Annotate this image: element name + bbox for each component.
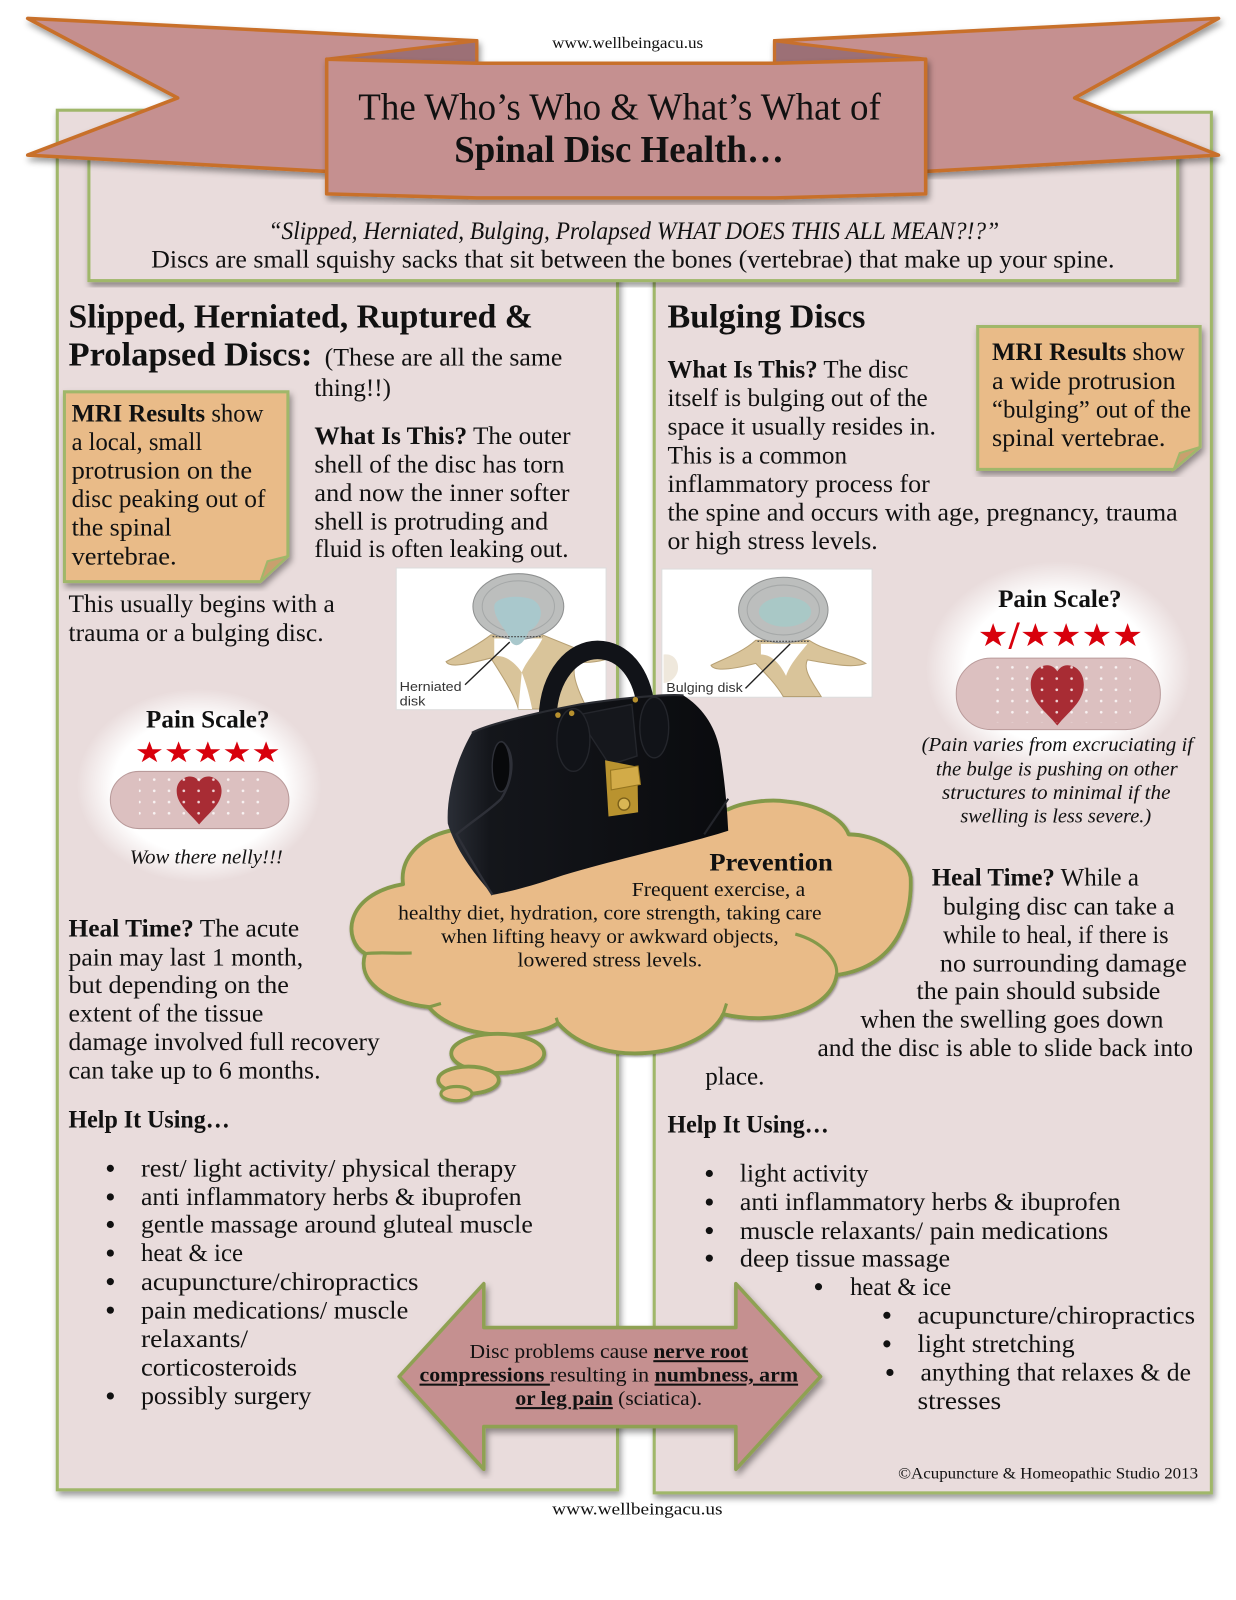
arrow: nerve root callout [399,1284,821,1469]
text: what is this right [667,357,1178,555]
list: left remedies: relaxants/ [141,1326,248,1353]
icon: bandage with heart [110,771,289,829]
text: heal time left: Heal Time? The acute [69,916,299,943]
text: prevention: healthy diet, hydration, core strength, taking care [398,902,822,924]
text: prevention: when lifting heavy or awkward objects, [441,926,779,948]
list: right remedies: light stretching [917,1331,1075,1358]
note: MRI results left: the spinal [72,515,172,542]
list: left remedies: possibly surgery [141,1383,312,1410]
text: heal time left: extent of the tissue [69,1000,263,1027]
pain scale left: Pain Scale? [146,707,270,734]
icon: doctor's bag [448,650,728,895]
website top: www.wellbeingacu.us [552,35,703,52]
text: what is this right: itself is bulging out of the [667,385,928,412]
text: what is this left: What Is This? The outer [314,423,571,450]
arrow: nerve root callout: compressions resulting in numbness, arm [420,1365,798,1387]
note: MRI results left: protrusion on the [72,458,252,485]
text: heal time left: pain may last 1 month, [69,944,303,971]
text: what is this left [314,423,571,563]
text: heal time right: when the swelling goes down [860,1007,1164,1034]
label: bulging disk: Bulging disk [666,681,743,695]
stars: one of five: ★/★★★★ [978,618,1143,654]
text: what is this left: shell is protruding and [314,509,549,536]
text: heal time left [69,916,380,1085]
text: prevention [398,849,833,971]
text: what is this right: the spine and occurs with age, pregnancy, trauma [667,499,1178,526]
list: left remedies [107,1156,533,1410]
note: MRI results left: MRI Results show [72,400,263,427]
pain scale left [77,689,322,883]
copyright: ©Acupuncture & Homeopathic Studio 2013 [898,1466,1198,1483]
text: pain note right: (Pain varies from excruciating if [922,734,1196,756]
note: MRI results left: disc peaking out of [72,486,266,513]
website bottom: www.wellbeingacu.us [552,1499,723,1518]
note: MRI results right: spinal vertebrae. [992,425,1165,452]
text: intro definition: Discs are small squishy sacks that sit between the bones (vertebrae) that make up your spine. [151,246,1114,273]
banner ribbon [28,18,1219,198]
ribbon right tail [775,18,1219,171]
text: heal time left: but depending on the [69,972,289,999]
note: MRI results right: a wide protrusion [992,368,1176,395]
cloud shape [352,801,911,1101]
ribbon right fold [775,41,926,63]
list: left remedies: gentle massage around gluteal muscle [141,1212,533,1239]
label: herniated disk: disk [400,694,426,708]
note: MRI results right: MRI Results show [992,339,1185,366]
list: right remedies: heat & ice [850,1274,951,1301]
panel: left column [57,110,617,1490]
list: left remedies: anti inflammatory herbs & ibuprofen [141,1184,522,1211]
heading: slipped discs: (These are all the same [325,344,562,371]
note: MRI results left [64,392,288,582]
text: pain note right [922,734,1196,827]
list: right remedies: anti inflammatory herbs & ibuprofen [740,1189,1121,1216]
text: intro question: “Slipped, Herniated, Bulging, Prolapsed WHAT DOES THIS ALL MEAN?!?” [269,218,999,245]
text: what is this right: or high stress levels. [667,528,878,555]
ribbon left fold [327,41,477,63]
heading: slipped discs: Prolapsed Discs: [69,336,312,373]
text: usually begins: trauma or a bulging disc. [69,620,324,647]
text: heal time right: place. [705,1064,764,1091]
text: what is this left: fluid is often leaking out. [314,536,569,563]
text: usually begins: This usually begins with a [69,591,335,618]
text: heal time right: and the disc is able to slide back into [817,1035,1193,1062]
list: right remedies [706,1161,1195,1415]
pain scale right: Pain Scale? [998,586,1122,613]
heading: slipped discs [69,299,562,402]
thought cloud: prevention [352,801,911,1101]
heading: help it using left: Help It Using… [69,1107,230,1134]
list: right remedies: anything that relaxes & de [921,1360,1191,1387]
label: herniated disk [400,680,462,708]
title: Spinal Disc Health… [454,129,784,171]
diagram: herniated disc [396,568,606,710]
heading: slipped discs: thing!!) [314,375,391,402]
text: pain note right: the bulge is pushing on other [936,759,1178,781]
list: right remedies: muscle relaxants/ pain medications [740,1218,1108,1245]
list: right remedies: light activity [740,1161,869,1188]
stars: five of five: ★★★★★ [135,735,281,769]
note: MRI results left: a local, small [72,429,202,456]
text: prevention: Frequent exercise, a [632,879,805,901]
heading: help it using right: Help It Using… [667,1112,829,1139]
text: heal time right: bulging disc can take a [943,893,1175,920]
pain scale left: Wow there nelly!!! [130,846,283,868]
text: prevention: lowered stress levels. [517,949,702,971]
text: usually begins [69,591,335,647]
text: pain note right: structures to minimal if the [942,782,1171,804]
note: MRI results right: “bulging” out of the [992,396,1191,423]
list: left remedies: corticosteroids [141,1355,297,1382]
arrow: nerve root callout: or leg pain (sciatica). [515,1388,702,1410]
heading: bulging discs: Bulging Discs [667,299,865,336]
text: pain note right: swelling is less severe.) [960,805,1151,827]
title: The Who’s Who & What’s What of [358,86,881,128]
text: what is this right: This is a common [667,442,848,469]
text: heal time right: while to heal, if there is [943,922,1169,949]
panel: right column [654,112,1211,1493]
list: left remedies: acupuncture/chiropractics [141,1269,419,1296]
list: left remedies: pain medications/ muscle [141,1297,408,1324]
note: MRI results left: vertebrae. [72,543,177,570]
text: heal time left: can take up to 6 months. [69,1058,321,1085]
text: what is this right: What Is This? The disc [667,357,908,384]
icon: bandage with heart [956,658,1160,730]
list: right remedies: deep tissue massage [740,1245,950,1272]
label: herniated disk: Herniated [400,680,462,694]
text: what is this right: inflammatory process for [667,471,930,498]
arrow: nerve root callout: Disc problems cause nerve root [470,1341,748,1363]
list: right remedies: acupuncture/chiropractics [917,1302,1195,1329]
diagram: bulging disc [662,569,872,697]
text: heal time left: damage involved full recovery [69,1029,380,1056]
text: heal time right [705,865,1193,1091]
ribbon left tail [28,18,477,171]
ribbon front [327,59,926,198]
pain scale right [926,561,1191,776]
heading: slipped discs: Slipped, Herniated, Ruptured & [69,299,533,336]
text: heal time right: the pain should subside [916,978,1160,1005]
list: right remedies: stresses [917,1388,1001,1415]
text: prevention: Prevention [709,849,833,876]
text: heal time right: no surrounding damage [940,950,1187,977]
panel: intro box [89,143,1178,281]
note: MRI results right [978,327,1200,469]
title [358,86,881,171]
text: heal time right: Heal Time? While a [932,865,1139,892]
list: left remedies: rest/ light activity/ physical therapy [141,1156,517,1183]
text: what is this right: space it usually resides in. [667,414,936,441]
list: left remedies: heat & ice [141,1240,243,1267]
text: what is this left: shell of the disc has torn [314,451,565,478]
text: what is this left: and now the inner softer [314,480,570,507]
